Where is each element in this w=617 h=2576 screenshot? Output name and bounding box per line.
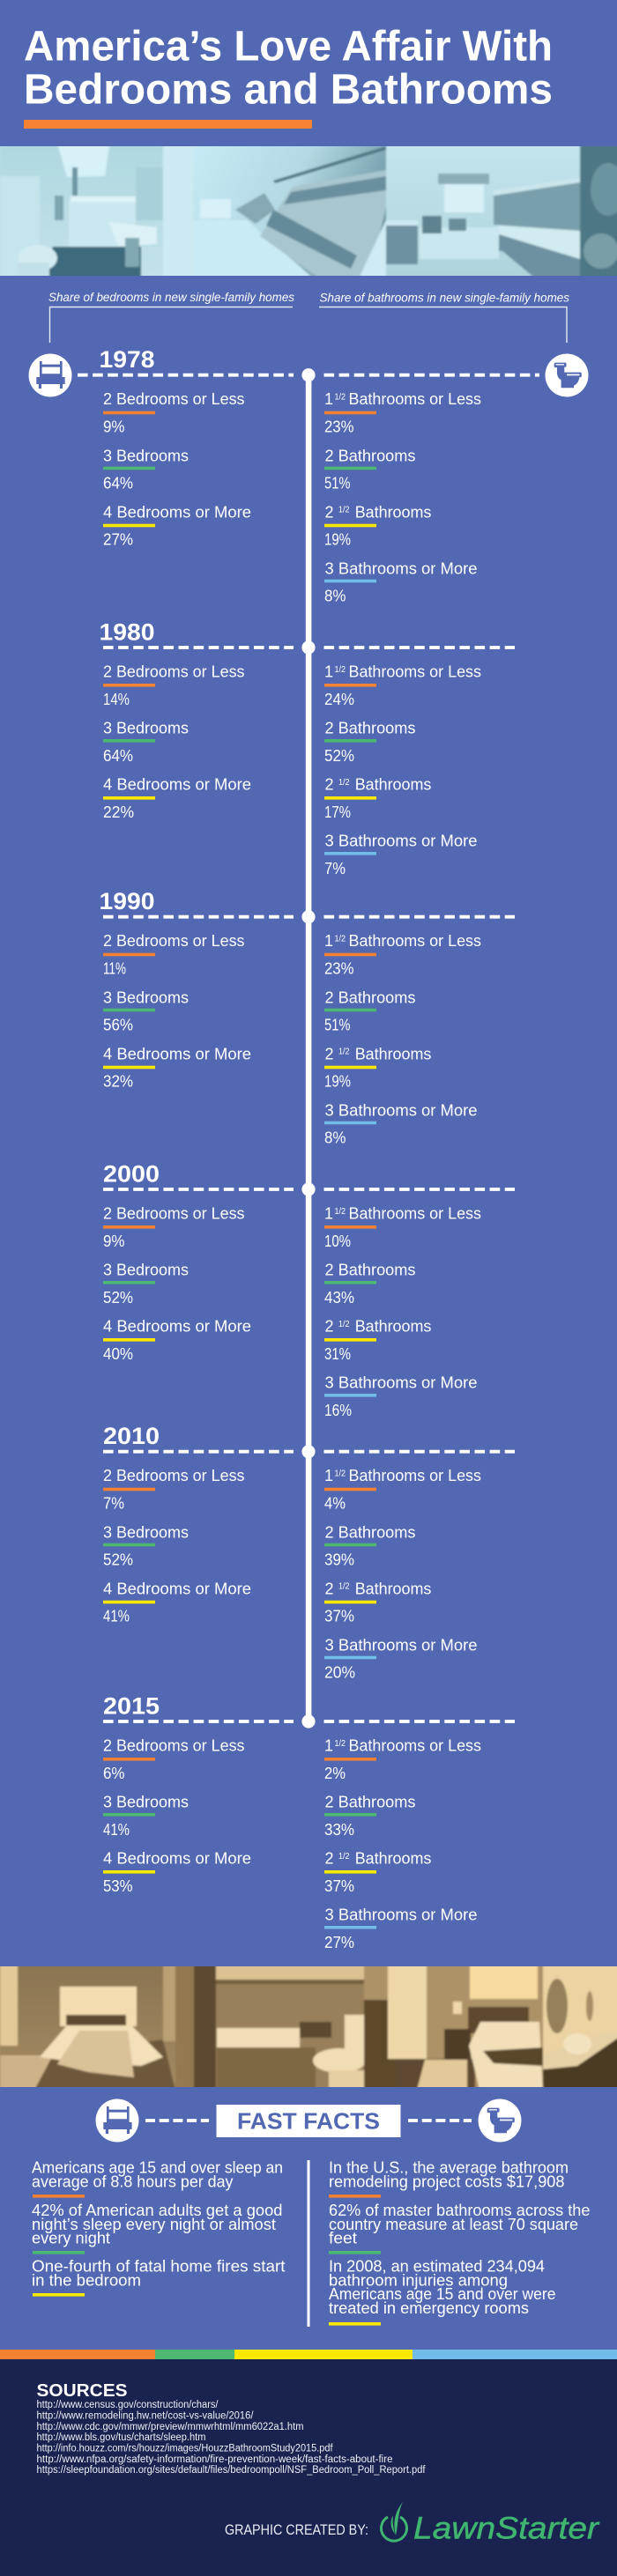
row: 1 1/2 bathrooms or less: Bathrooms or Less: [349, 932, 481, 950]
fact: sleep hours: [32, 2159, 283, 2198]
row: 4 bedrooms or more: 32%: [103, 1073, 133, 1091]
row: 3 bathrooms or more: 8%: [324, 1129, 346, 1147]
row: 2 bedrooms or less: 2 Bedrooms or Less: [103, 390, 245, 408]
timeline node: [301, 1445, 316, 1458]
row: 2 bathrooms: 2 Bathrooms: [324, 988, 416, 1006]
row: 2 bedrooms or less: [103, 1467, 245, 1513]
row: 3 bedrooms: [103, 1794, 189, 1839]
fact: remodeling cost: In the U.S., the average bathroom: [329, 2159, 569, 2177]
fast facts divider: [307, 2160, 310, 2327]
fact: sleep hours: Americans age 15 and over sleep an: [32, 2159, 283, 2177]
row: 1 1/2 bathrooms or less: 1: [324, 932, 333, 950]
sources list: http://info.houzz.com/rs/houzz/images/HouzzBathroomStudy2015.pdf: [37, 2444, 333, 2454]
row: 2 1/2 bathrooms: [324, 1318, 431, 1363]
row: 4 bedrooms or more: [103, 776, 251, 821]
row: 2 1/2 bathrooms: 1/2: [338, 1320, 350, 1329]
timeline block: 1990: [99, 888, 515, 1147]
row: 2 1/2 bathrooms: 31%: [324, 1345, 351, 1363]
row: 2 bedrooms or less: 2 Bedrooms or Less: [103, 1467, 245, 1484]
row: 4 bedrooms or more: [103, 1318, 251, 1363]
row: 1 1/2 bathrooms or less: Bathrooms or Less: [349, 1467, 481, 1484]
title: America’s Love Affair With: [24, 23, 553, 70]
connector: left fast facts dashes: [145, 2119, 209, 2122]
dashed connectors: [103, 1188, 515, 1191]
icon: fast facts bed: [95, 2099, 139, 2143]
row: 2 bedrooms or less: 2 Bedrooms or Less: [103, 1737, 245, 1755]
row: 1 1/2 bathrooms or less: 1: [324, 1737, 333, 1755]
icon: toilet: [545, 354, 589, 396]
row: 3 bathrooms or more: 20%: [324, 1664, 355, 1682]
row: 4 bedrooms or more: 53%: [103, 1877, 132, 1895]
photo strip: blue tinted rooms: [0, 141, 617, 282]
row: 2 bedrooms or less: [103, 663, 245, 708]
row: 3 bathrooms or more: 3 Bathrooms or More: [324, 1906, 478, 1924]
row: 2 bathrooms: [324, 1262, 416, 1307]
row: 3 bathrooms or more: [324, 833, 478, 877]
row: 2 1/2 bathrooms: 2: [324, 1850, 334, 1868]
fact: remodeling cost: [329, 2159, 569, 2198]
row: 1 1/2 bathrooms or less: 1/2: [335, 935, 346, 944]
row: 2 bathrooms: 39%: [324, 1551, 354, 1569]
timeline block: 2010: [103, 1423, 515, 1682]
row: 3 bedrooms: [103, 1523, 189, 1569]
row: 2 bedrooms or less: 9%: [103, 1232, 125, 1250]
row: 1 1/2 bathrooms or less: [324, 1467, 481, 1513]
heading: fast facts: [217, 2105, 400, 2137]
logo wordmark: LawnStarter: [413, 2512, 599, 2546]
row: 2 1/2 bathrooms: 2: [324, 776, 334, 794]
row: 3 bedrooms: 52%: [103, 1289, 133, 1307]
row: 2 1/2 bathrooms: Bathrooms: [355, 503, 431, 521]
icon: fast facts toilet: [478, 2099, 522, 2143]
timeline block: 1978: [78, 346, 539, 605]
row: 2 bathrooms: [324, 1794, 416, 1839]
row: 2 bathrooms: 2 Bathrooms: [324, 1523, 416, 1541]
row: 2 bedrooms or less: 7%: [103, 1495, 124, 1513]
timeline spine: [306, 375, 311, 1721]
row: 4 bedrooms or more: 27%: [103, 531, 133, 549]
fact: good night's sleep: [32, 2202, 282, 2254]
row: 2 bedrooms or less: 2 Bedrooms or Less: [103, 663, 245, 680]
row: 2 1/2 bathrooms: 37%: [324, 1608, 354, 1625]
subtitle: bedrooms: Share of bedrooms in new single-family homes: [48, 290, 294, 304]
fact: good night's sleep: 42% of American adults get a good: [32, 2202, 282, 2219]
row: 3 bedrooms: 52%: [103, 1551, 133, 1569]
row: 1 1/2 bathrooms or less: 1/2: [335, 665, 346, 675]
row: 1 1/2 bathrooms or less: 1/2: [335, 1469, 346, 1479]
bracket: bedrooms: [49, 307, 293, 343]
row: 2 1/2 bathrooms: Bathrooms: [355, 1045, 431, 1062]
row: 4 bedrooms or more: 41%: [103, 1608, 130, 1625]
row: 2 1/2 bathrooms: 2: [324, 503, 334, 521]
timeline node: [301, 1182, 316, 1196]
row: 4 bedrooms or more: 4 Bedrooms or More: [103, 1045, 251, 1062]
dashed connectors: [103, 1450, 515, 1454]
sources list: http://www.remodeling.hw.net/cost-vs-value/2016/: [37, 2410, 254, 2421]
row: 2 1/2 bathrooms: [324, 1580, 431, 1625]
fact: good night's sleep: every night: [32, 2230, 110, 2247]
row: 3 bedrooms: 3 Bedrooms: [103, 988, 189, 1006]
bracket: bathrooms: [319, 307, 567, 343]
sources list: http://www.nfpa.org/safety-information/fire-prevention-week/fast-facts-about-fire: [37, 2454, 392, 2465]
row: 3 bathrooms or more: 7%: [324, 860, 346, 877]
row: 3 bathrooms or more: 3 Bathrooms or More: [324, 1101, 478, 1119]
timeline node: [301, 910, 316, 923]
fact: bathroom injuries: [329, 2257, 555, 2326]
row: 2 bathrooms: 51%: [324, 1017, 351, 1034]
row: 1 1/2 bathrooms or less: Bathrooms or Less: [349, 1205, 481, 1223]
row: 1 1/2 bathrooms or less: [324, 932, 481, 978]
row: 3 bathrooms or more: 3 Bathrooms or More: [324, 1636, 478, 1654]
row: 2 bedrooms or less: [103, 1205, 245, 1250]
row: 2 bathrooms: 52%: [324, 747, 354, 765]
connector: right fast facts dashes: [408, 2119, 472, 2122]
row: 3 bathrooms or more: [324, 1101, 478, 1147]
row: 2 1/2 bathrooms: 2: [324, 1045, 334, 1062]
fact: bathroom injuries: bathroom injuries among: [329, 2271, 508, 2289]
fact: bathroom injuries: In 2008, an estimated 234,094: [329, 2257, 545, 2275]
row: 2 1/2 bathrooms: 2: [324, 1580, 334, 1597]
footer panel: [0, 2359, 617, 2576]
year label: 1980: [99, 618, 155, 645]
row: 2 bedrooms or less: 14%: [103, 691, 130, 708]
row: 3 bedrooms: 3 Bedrooms: [103, 447, 189, 464]
row: 2 1/2 bathrooms: Bathrooms: [355, 1318, 431, 1336]
row: 2 1/2 bathrooms: 1/2: [338, 778, 350, 788]
timeline node: [301, 1714, 316, 1728]
row: 3 bedrooms: 3 Bedrooms: [103, 1523, 189, 1541]
row: 1 1/2 bathrooms or less: 1: [324, 390, 333, 408]
row: 4 bedrooms or more: [103, 1045, 251, 1091]
fast facts: bathroom column: [329, 2159, 591, 2326]
row: 2 bathrooms: [324, 1523, 416, 1569]
row: 1 1/2 bathrooms or less: [324, 663, 481, 708]
year label: 2015: [103, 1693, 160, 1720]
fact: home fires: [32, 2257, 286, 2297]
row: 3 bathrooms or more: 27%: [324, 1934, 354, 1951]
icon: bed: [28, 354, 72, 396]
row: 4 bedrooms or more: 40%: [103, 1345, 133, 1363]
row: 2 bedrooms or less: 11%: [103, 960, 126, 978]
row: 3 bedrooms: 64%: [103, 747, 133, 765]
row: 4 bedrooms or more: [103, 1850, 251, 1895]
year label: 1978: [99, 346, 155, 373]
row: 2 1/2 bathrooms: [324, 776, 431, 821]
row: 2 bathrooms: 2 Bathrooms: [324, 1794, 416, 1811]
row: 3 bedrooms: [103, 988, 189, 1034]
row: 1 1/2 bathrooms or less: 1: [324, 1467, 333, 1484]
row: 1 1/2 bathrooms or less: [324, 1737, 481, 1782]
fact: remodeling cost: remodeling project costs $17,908: [329, 2173, 564, 2191]
row: 2 1/2 bathrooms: [324, 1850, 431, 1895]
title: [24, 23, 553, 113]
row: 4 bedrooms or more: 4 Bedrooms or More: [103, 503, 251, 521]
row: 2 1/2 bathrooms: 1/2: [338, 1582, 350, 1592]
sources list: http://www.cdc.gov/mmwr/preview/mmwrhtml/mm6022a1.htm: [37, 2422, 303, 2432]
fact: master bathrooms: [329, 2202, 591, 2254]
year label: 1990: [99, 888, 155, 914]
row: 4 bedrooms or more: 22%: [103, 803, 134, 821]
row: 2 1/2 bathrooms: 1/2: [338, 1852, 350, 1862]
sources list: http://www.bls.gov/tus/charts/sleep.htm: [37, 2432, 206, 2443]
row: 1 1/2 bathrooms or less: 1: [324, 1205, 333, 1223]
fact: home fires: in the bedroom: [32, 2271, 141, 2289]
timeline block: 1980: [99, 618, 515, 877]
sources heading: SOURCES: [37, 2381, 127, 2401]
row: 1 1/2 bathrooms or less: 1/2: [335, 1207, 346, 1217]
dashed connectors: [103, 646, 515, 649]
row: 1 1/2 bathrooms or less: Bathrooms or Less: [349, 663, 481, 680]
row: 4 bedrooms or more: 4 Bedrooms or More: [103, 1850, 251, 1868]
row: 2 bedrooms or less: [103, 390, 245, 436]
row: 2 1/2 bathrooms: 1/2: [338, 506, 350, 515]
fast facts: bedroom column: [32, 2159, 286, 2297]
row: 2 1/2 bathrooms: 1/2: [338, 1047, 350, 1057]
row: 1 1/2 bathrooms or less: 1: [324, 663, 333, 680]
row: 2 bedrooms or less: 2 Bedrooms or Less: [103, 1205, 245, 1223]
row: 3 bathrooms or more: 3 Bathrooms or More: [324, 833, 478, 850]
row: 2 bedrooms or less: 9%: [103, 418, 125, 436]
row: 1 1/2 bathrooms or less: [324, 1205, 481, 1250]
row: 1 1/2 bathrooms or less: 10%: [324, 1232, 351, 1250]
row: 2 bathrooms: [324, 988, 416, 1034]
dashed connectors: [103, 1720, 515, 1723]
row: 3 bathrooms or more: [324, 1636, 478, 1682]
row: 3 bathrooms or more: 3 Bathrooms or More: [324, 1374, 478, 1392]
subtitle: bathrooms: Share of bathrooms in new single-family homes: [319, 291, 569, 305]
fact: sleep hours: average of 8.8 hours per day: [32, 2173, 233, 2191]
icon: lawnstarter logo: [382, 2502, 407, 2541]
row: 2 1/2 bathrooms: 2: [324, 1318, 334, 1336]
row: 2 1/2 bathrooms: 17%: [324, 803, 351, 821]
row: 4 bedrooms or more: 4 Bedrooms or More: [103, 1318, 251, 1336]
title: Bedrooms and Bathrooms: [24, 66, 553, 113]
dashed connectors: [103, 915, 515, 919]
timeline node: [301, 368, 316, 381]
row: 3 bathrooms or more: 16%: [324, 1402, 352, 1419]
year label: 2000: [103, 1161, 160, 1188]
row: 3 bedrooms: [103, 1262, 189, 1307]
row: 1 1/2 bathrooms or less: 4%: [324, 1495, 346, 1513]
heading: fast facts: FAST FACTS: [237, 2108, 380, 2135]
colour stripe: [0, 2350, 617, 2359]
row: 2 bathrooms: 2 Bathrooms: [324, 1262, 416, 1279]
timeline node: [301, 640, 316, 655]
fact: master bathrooms: 62% of master bathrooms across the: [329, 2202, 591, 2219]
row: 2 1/2 bathrooms: Bathrooms: [355, 1850, 431, 1868]
sources list: [37, 2400, 426, 2476]
row: 2 bathrooms: 43%: [324, 1289, 354, 1307]
fact: bathroom injuries: treated in emergency rooms: [329, 2299, 529, 2317]
row: 4 bedrooms or more: [103, 503, 251, 549]
row: 2 1/2 bathrooms: Bathrooms: [355, 776, 431, 794]
row: 1 1/2 bathrooms or less: Bathrooms or Less: [349, 1737, 481, 1755]
row: 2 1/2 bathrooms: [324, 1045, 431, 1091]
row: 3 bathrooms or more: [324, 559, 478, 605]
row: 2 bedrooms or less: 6%: [103, 1765, 125, 1782]
row: 2 1/2 bathrooms: 19%: [324, 531, 351, 549]
row: 4 bedrooms or more: 4 Bedrooms or More: [103, 776, 251, 794]
year label: 2010: [103, 1423, 160, 1449]
dashed connectors: [78, 374, 539, 377]
row: 3 bathrooms or more: [324, 1906, 478, 1951]
fact: good night's sleep: night’s sleep every night or almost: [32, 2216, 276, 2233]
sources list: https://sleepfoundation.org/sites/default/files/bedroompoll/NSF_Bedroom_Poll_Report.pdf: [37, 2465, 426, 2476]
row: 1 1/2 bathrooms or less: 1/2: [335, 1739, 346, 1749]
row: 3 bedrooms: [103, 447, 189, 492]
row: 1 1/2 bathrooms or less: 23%: [324, 960, 354, 978]
row: 2 bathrooms: 51%: [324, 475, 351, 492]
fact: bathroom injuries: Americans age 15 and over were: [329, 2285, 555, 2303]
row: 3 bedrooms: 64%: [103, 475, 133, 492]
row: 2 bedrooms or less: 2 Bedrooms or Less: [103, 932, 245, 950]
row: 3 bathrooms or more: 3 Bathrooms or More: [324, 559, 478, 577]
fact: master bathrooms: feet: [329, 2230, 357, 2247]
row: 3 bathrooms or more: [324, 1374, 478, 1419]
title underline: [24, 120, 312, 129]
row: 2 bathrooms: 2 Bathrooms: [324, 447, 416, 464]
row: 3 bedrooms: 41%: [103, 1821, 130, 1839]
row: 3 bathrooms or more: 8%: [324, 588, 346, 605]
row: 2 bathrooms: [324, 720, 416, 765]
row: 2 bathrooms: [324, 447, 416, 492]
row: 1 1/2 bathrooms or less: 23%: [324, 418, 354, 436]
row: 2 bathrooms: 33%: [324, 1821, 354, 1839]
row: 2 bedrooms or less: [103, 932, 245, 978]
photo strip: sepia tinted rooms: [0, 1961, 617, 2093]
row: 2 bedrooms or less: [103, 1737, 245, 1782]
row: 4 bedrooms or more: [103, 1580, 251, 1625]
row: 3 bedrooms: 3 Bedrooms: [103, 1262, 189, 1279]
row: 1 1/2 bathrooms or less: 1/2: [335, 393, 346, 403]
row: 1 1/2 bathrooms or less: Bathrooms or Less: [349, 390, 481, 408]
timeline block: 2000: [103, 1161, 515, 1419]
row: 3 bedrooms: 3 Bedrooms: [103, 1794, 189, 1811]
row: 2 1/2 bathrooms: Bathrooms: [355, 1580, 431, 1597]
timeline block: 2015: [103, 1693, 515, 1951]
row: 2 1/2 bathrooms: 37%: [324, 1877, 354, 1895]
row: 4 bedrooms or more: 4 Bedrooms or More: [103, 1580, 251, 1597]
sources list: http://www.census.gov/construction/chars/: [37, 2400, 219, 2410]
row: 3 bedrooms: 56%: [103, 1017, 133, 1034]
row: 3 bedrooms: [103, 720, 189, 765]
row: 3 bedrooms: 3 Bedrooms: [103, 720, 189, 737]
fact: master bathrooms: country measure at least 70 square: [329, 2216, 578, 2233]
credit text: GRAPHIC CREATED BY:: [225, 2521, 368, 2538]
row: 1 1/2 bathrooms or less: 24%: [324, 691, 354, 708]
row: 2 bathrooms: 2 Bathrooms: [324, 720, 416, 737]
row: 1 1/2 bathrooms or less: [324, 390, 481, 436]
row: 1 1/2 bathrooms or less: 2%: [324, 1765, 346, 1782]
row: 2 1/2 bathrooms: 19%: [324, 1073, 351, 1091]
row: 2 1/2 bathrooms: [324, 503, 431, 549]
fact: home fires: One-fourth of fatal home fires start: [32, 2257, 286, 2275]
